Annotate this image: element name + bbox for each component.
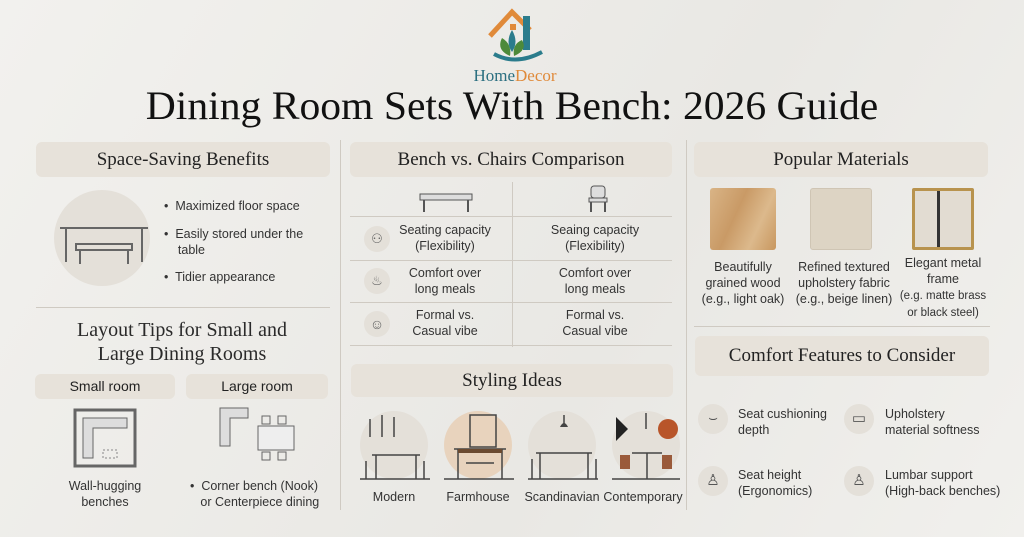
logo: HomeDecor bbox=[473, 66, 557, 85]
panel: styling ideas: Scandinavian bbox=[524, 490, 600, 504]
panel: comfort features: ⌣ bbox=[708, 410, 718, 427]
panel: comfort features: Lumbar support bbox=[885, 468, 973, 482]
heading bbox=[36, 142, 330, 177]
title: Dining Room Sets With Bench: 2026 Guide bbox=[146, 83, 878, 128]
small room: Wall-hugging bbox=[69, 479, 141, 493]
panel: comfort features: Seat cushioning bbox=[738, 407, 827, 421]
panel: popular materials: grained wood bbox=[705, 276, 781, 290]
panel: comfort features: Upholstery bbox=[885, 407, 945, 421]
row icons: ⚇ bbox=[371, 231, 383, 246]
panel: comfort features bbox=[695, 336, 1000, 498]
swatch: wood bbox=[710, 188, 776, 250]
panel: popular materials: frame bbox=[927, 272, 959, 286]
panel: comfort features: (High-back benches) bbox=[885, 484, 1000, 498]
row icons bbox=[364, 226, 390, 252]
panel: bench vs chairs bbox=[350, 142, 672, 347]
panel: popular materials: (e.g., beige linen) bbox=[796, 292, 892, 306]
large room bbox=[186, 374, 328, 509]
panel: bench vs chairs: (Flexibility) bbox=[565, 239, 625, 253]
panel: space-saving benefits bbox=[36, 142, 330, 286]
panel: comfort features: material softness bbox=[885, 423, 979, 437]
panel: bench vs chairs: Casual vibe bbox=[562, 324, 628, 338]
icon: chair bbox=[588, 186, 608, 212]
swatch: fabric bbox=[810, 188, 872, 250]
panel: comfort features: ▭ bbox=[852, 410, 866, 427]
bullets bbox=[164, 199, 303, 284]
panel: popular materials: Refined textured bbox=[798, 260, 890, 274]
icon: bench bbox=[420, 194, 472, 212]
bullets: table bbox=[178, 243, 205, 257]
panel: comfort features: ♙ bbox=[852, 472, 866, 489]
panel: bench vs chairs: ♨ bbox=[371, 273, 383, 288]
small room: benches bbox=[81, 495, 129, 509]
panel: bench vs chairs: Casual vibe bbox=[412, 324, 478, 338]
panel: popular materials: (e.g. matte brass bbox=[900, 290, 986, 302]
panel: layout tips bbox=[35, 319, 328, 509]
panel: bench vs chairs: Comfort over bbox=[559, 266, 631, 280]
panel: popular materials: Elegant metal bbox=[905, 256, 981, 270]
small room: Small room bbox=[70, 378, 140, 394]
heading bbox=[695, 336, 989, 376]
bullets: • Tidier appearance bbox=[164, 270, 275, 284]
panel: popular materials bbox=[694, 142, 988, 319]
panel: bench vs chairs: long meals bbox=[415, 282, 475, 296]
heading: Layout Tips for Small and bbox=[77, 319, 287, 341]
panel: bench vs chairs: Seating capacity bbox=[399, 223, 491, 237]
small room bbox=[35, 374, 175, 509]
panel: popular materials: (e.g., light oak) bbox=[702, 292, 784, 306]
panel: comfort features: ♙ bbox=[706, 472, 720, 489]
heading: Comfort Features to Consider bbox=[729, 345, 955, 366]
heading bbox=[351, 364, 673, 397]
panel: popular materials: upholstery fabric bbox=[798, 276, 890, 290]
panel: comfort features: (Ergonomics) bbox=[738, 484, 812, 498]
panel: bench vs chairs: Seaing capacity bbox=[551, 223, 639, 237]
panel: bench vs chairs: (Flexibility) bbox=[415, 239, 475, 253]
large room: • Corner bench (Nook) bbox=[190, 479, 318, 493]
icon: table with bench bbox=[54, 190, 150, 286]
panel: comfort features: depth bbox=[738, 423, 769, 437]
panel: bench vs chairs: long meals bbox=[565, 282, 625, 296]
panel: bench vs chairs: Formal vs. bbox=[566, 308, 624, 322]
heading bbox=[77, 319, 287, 365]
panel: styling ideas: Contemporary bbox=[603, 490, 683, 504]
swatch: metal bbox=[912, 188, 974, 250]
large room: or Centerpiece dining bbox=[200, 495, 319, 509]
heading: Styling Ideas bbox=[462, 370, 562, 391]
panel: popular materials: Beautifully bbox=[714, 260, 772, 274]
panel: popular materials: or black steel) bbox=[907, 307, 979, 319]
bullets: • Maximized floor space bbox=[164, 199, 300, 213]
panel: bench vs chairs: Comfort over bbox=[409, 266, 481, 280]
heading: Space-Saving Benefits bbox=[97, 149, 269, 170]
heading: Large Dining Rooms bbox=[98, 343, 266, 365]
heading bbox=[694, 142, 988, 177]
panel: styling ideas: Modern bbox=[373, 490, 415, 504]
heading bbox=[350, 142, 672, 177]
panel: bench vs chairs: ☺ bbox=[370, 316, 384, 332]
large room: Large room bbox=[221, 378, 293, 394]
heading: Bench vs. Chairs Comparison bbox=[398, 149, 624, 170]
panel: styling ideas: Farmhouse bbox=[446, 490, 510, 504]
panel: styling ideas bbox=[351, 364, 683, 504]
panel: bench vs chairs: Formal vs. bbox=[416, 308, 474, 322]
bullets: • Easily stored under the bbox=[164, 227, 303, 241]
heading: Popular Materials bbox=[773, 149, 909, 170]
logo bbox=[473, 8, 557, 85]
panel: comfort features: Seat height bbox=[738, 468, 801, 482]
